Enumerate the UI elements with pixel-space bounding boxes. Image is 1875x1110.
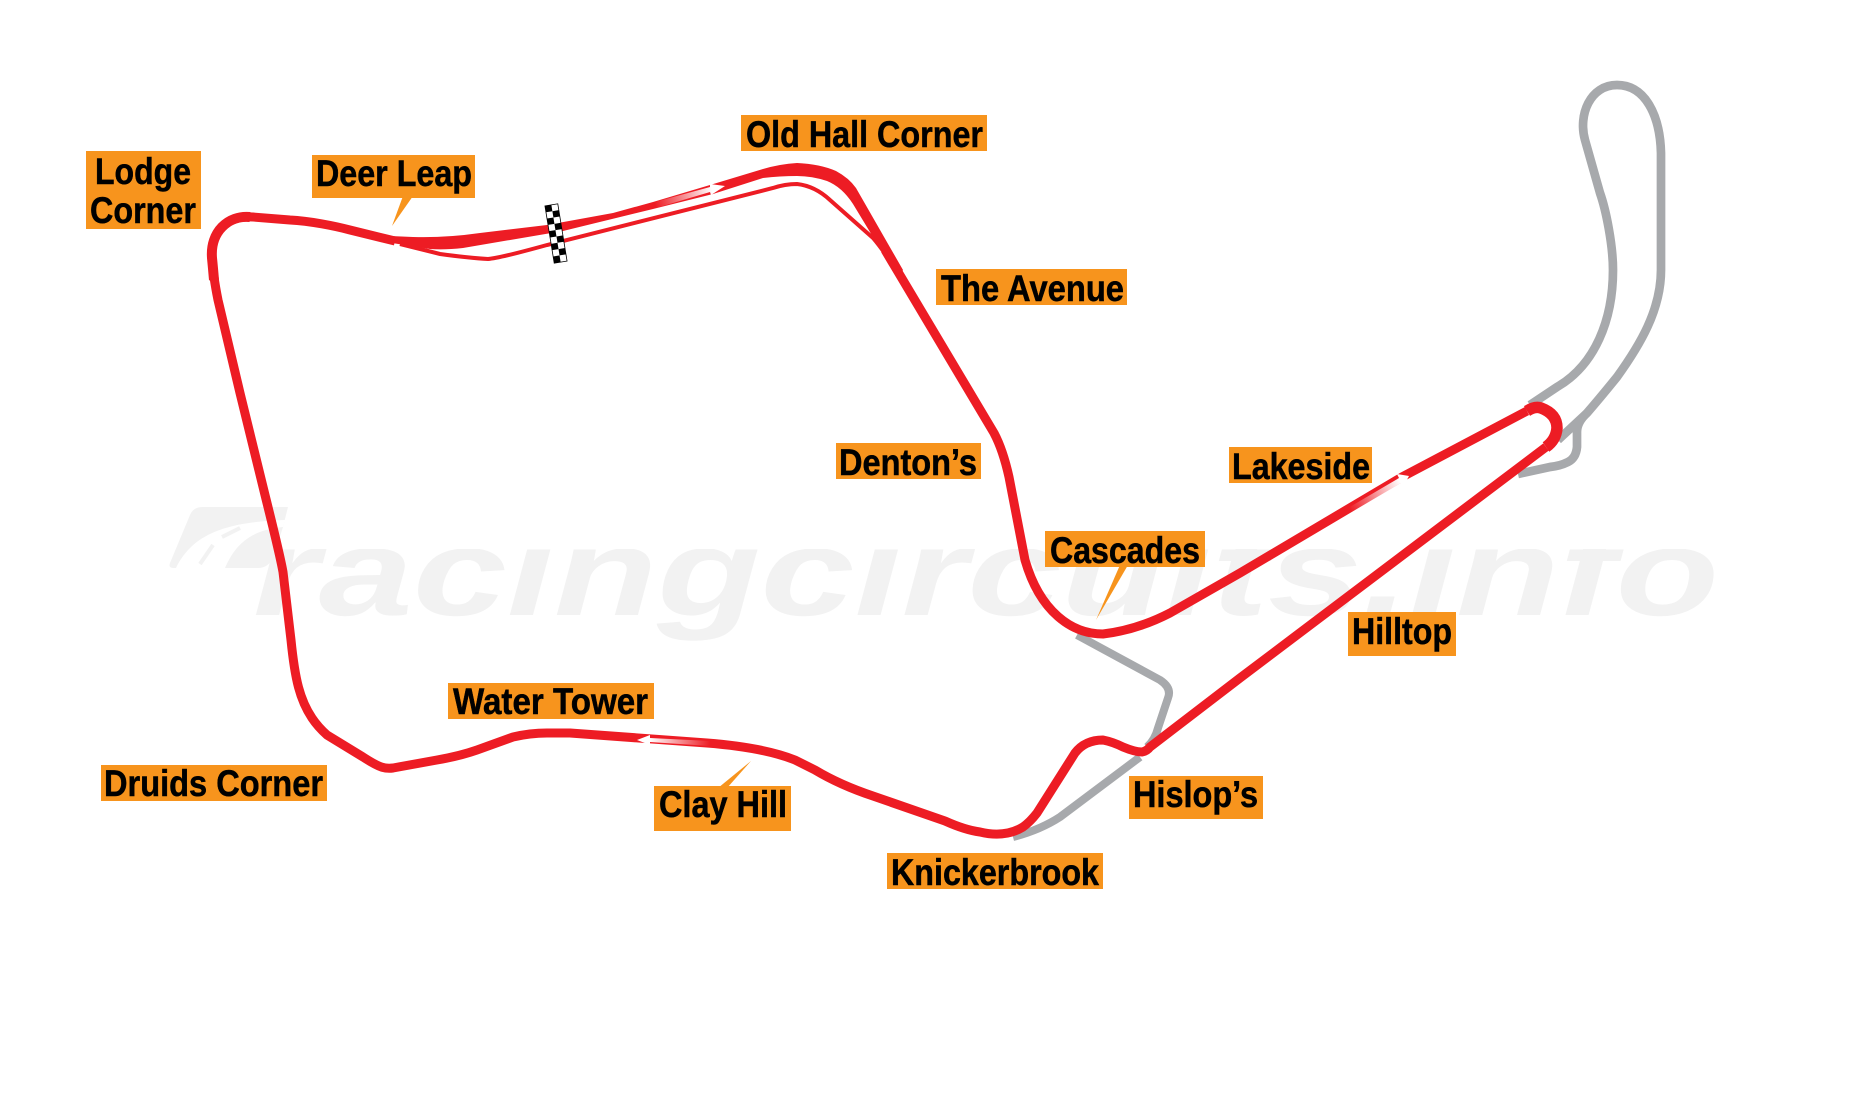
watermark text: racingcircuits.info xyxy=(253,504,1719,642)
label: Lodge Corner: Corner xyxy=(90,190,196,231)
label: Old Hall Corner: Old Hall Corner xyxy=(746,114,983,155)
label: Lakeside: Lakeside xyxy=(1232,446,1370,487)
label: Water Tower: Water Tower xyxy=(453,681,648,722)
label: Hilltop: Hilltop xyxy=(1352,611,1452,652)
red track: Lakeside hairpin thick section xyxy=(1527,407,1557,447)
red track: inner chicane line xyxy=(400,184,900,277)
label: Cascades: Cascades xyxy=(1050,530,1200,571)
label: Druids Corner: Druids Corner xyxy=(104,763,323,804)
watermark: racingcircuits.info xyxy=(170,504,1719,642)
label: Clay Hill: Clay Hill xyxy=(659,784,787,825)
direction arrow: Lakeside xyxy=(1348,474,1409,512)
label: Denton's: Denton’s xyxy=(839,442,977,483)
label: Cascades xyxy=(1045,530,1205,620)
red track: main circuit xyxy=(212,217,1546,834)
label: Deer Leap xyxy=(312,153,475,226)
grey unused track: hairpin loop xyxy=(1518,85,1661,474)
label: Deer Leap: Deer Leap xyxy=(316,153,472,194)
label: Knickerbrook: Knickerbrook xyxy=(891,852,1099,893)
direction arrow: start straight xyxy=(655,184,725,208)
red track: Old Hall thick band xyxy=(390,163,903,278)
label: Clay Hill xyxy=(654,761,791,831)
start finish chequered flag xyxy=(545,204,567,263)
red track: Lodge corner thick section xyxy=(212,217,250,280)
circuit map xyxy=(86,80,1714,889)
label: Hislop's: Hislop’s xyxy=(1133,774,1258,815)
watermark logo xyxy=(170,507,288,568)
label: Lodge Corner: Lodge xyxy=(95,151,191,192)
label: The Avenue: The Avenue xyxy=(941,268,1124,309)
direction arrow: Water Tower xyxy=(637,735,710,746)
grey unused track: Hislop's bypass xyxy=(1013,635,1169,837)
label: Lodge Corner xyxy=(86,151,201,231)
